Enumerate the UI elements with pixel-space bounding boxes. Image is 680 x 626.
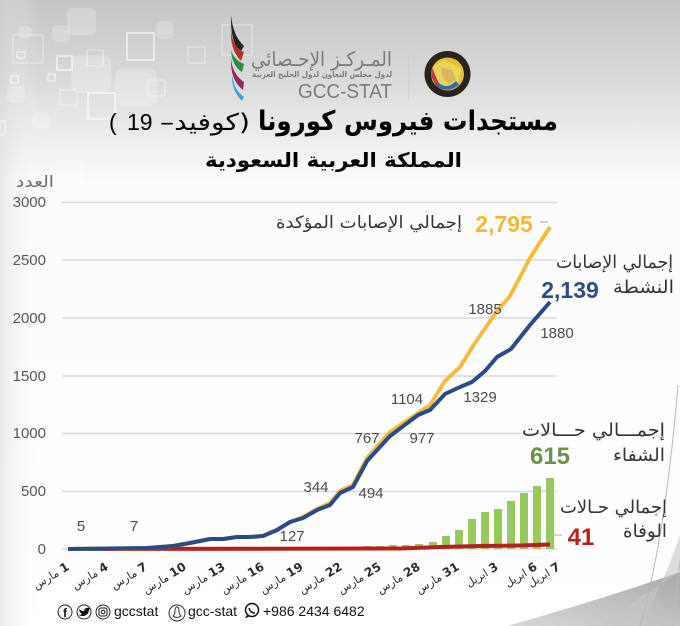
data labels [77,301,574,545]
x axis date labels: 19 مارس [257,560,306,596]
x axis date labels: 10 مارس [140,560,189,596]
data labels: 1329 [463,389,497,406]
logo: organisation name [251,47,392,103]
callout: total confirmed [276,211,533,237]
handle: gcc-stat: gcc-stat [188,603,237,619]
x axis date labels: 31 مارس [413,560,462,596]
icon: GCC emblem [424,51,470,97]
y axis title: العدد [16,172,54,191]
callout: active cases: إجمالي الإصابات [556,252,673,273]
phone number: +986 2434 6482 [263,603,365,619]
x axis date labels: 28 مارس [374,560,423,596]
x axis date labels: 22 مارس [296,560,345,596]
logo: GCC-STAT ribbon [231,15,244,101]
y axis labels: 1500 [13,368,46,385]
bars: recovered cases [363,478,554,549]
callout: deaths: الوفاة [623,521,667,542]
line: active cases [68,302,550,549]
y axis labels: 3000 [13,194,46,211]
logo: organisation name: المـركـز الإحـصائي [251,47,392,72]
footer: social contacts [58,603,365,621]
callout: recovered: إجمـــالي حـــالات [522,420,665,441]
logo: organisation name: لدول مجلس التعاون لدول الخليج العربية [252,70,392,80]
data labels: 1104 [391,391,423,408]
title: مستجدات فيروس كورونا [258,106,558,137]
subtitle: المملكة العربية السعودية [205,148,462,172]
x axis date labels: 7 مارس [108,560,150,592]
title: ( [109,109,117,135]
data labels: 977 [409,430,435,447]
x axis date labels: 3 ابريل [463,560,501,590]
callout: recovered: 615 [530,443,570,470]
callout: deaths: 41 [568,524,594,551]
callout: recovered: الشفاء [613,445,665,466]
icon: instagram [96,605,110,619]
x axis date labels: 25 مارس [335,560,384,596]
y axis labels: 500 [21,483,46,500]
x axis date labels: 7 ابريل [525,560,563,590]
callout: active cases [541,252,674,303]
line: total confirmed [68,227,550,549]
y axis labels [13,194,46,558]
icon: whatsapp [245,604,258,618]
icon: facebook: f [63,606,68,620]
callout: total confirmed: 2,795 [475,211,533,237]
x axis date labels [30,560,563,596]
line and bar chart [13,194,562,558]
callout: total confirmed: إجمالي الإصابات المؤكدة [276,213,462,233]
data labels: 1885 [468,301,502,318]
logo: organisation name: GCC-STAT [298,81,392,103]
data labels: 7 [130,518,138,535]
x axis date labels: 4 مارس [69,560,111,592]
icon: twitter [77,605,91,619]
callout: deaths: إجمالي حـالات [560,497,667,518]
title: 19 [127,109,153,135]
x axis date labels: 6 ابريل [502,560,540,590]
x axis date labels: 13 مارس [179,560,228,596]
y axis labels: 0 [38,541,46,558]
callout: recovered [522,420,665,470]
callout: deaths [560,497,667,551]
x axis date labels: 1 مارس [30,560,72,592]
callout: active cases: 2,139 [541,277,599,303]
title [109,106,558,137]
y axis labels: 2000 [13,310,46,327]
icon: facebook [58,605,72,620]
x axis date labels: 16 مارس [218,560,267,596]
title: (كوفيد– [160,110,250,136]
data labels: 5 [77,518,85,535]
data labels: 344 [303,479,329,496]
icon: snapchat [169,605,185,621]
line: total deaths [68,544,550,549]
data labels: 767 [354,430,380,447]
y axis labels: 1000 [13,425,46,442]
data labels: 494 [358,485,384,502]
data labels: 127 [279,528,305,545]
handle: gccstat: gccstat [114,603,158,619]
data labels: 1880 [540,325,574,342]
callout: active cases: النشطة [613,277,674,298]
y axis labels: 2500 [13,252,46,269]
